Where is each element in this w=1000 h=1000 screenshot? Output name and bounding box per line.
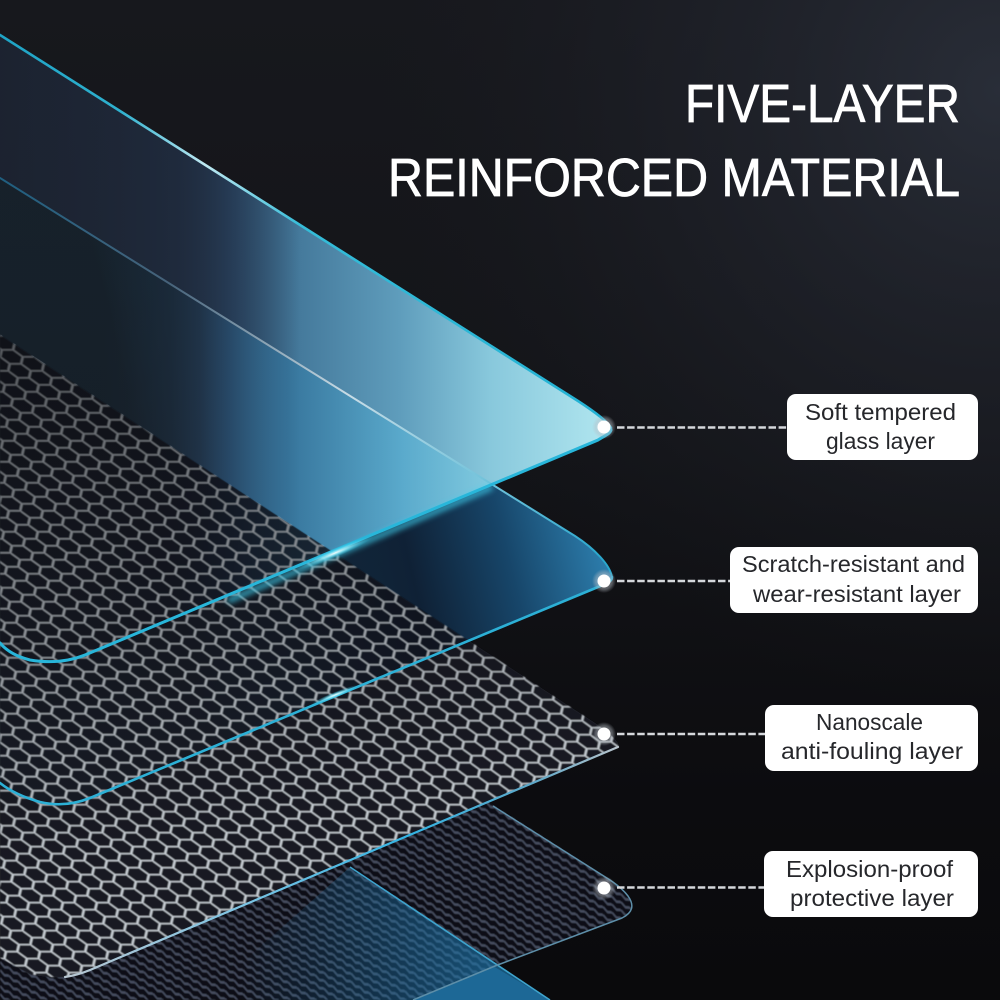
- layer 4: striped sheet: [0, 770, 632, 1000]
- label text: Nanoscale: [816, 709, 923, 735]
- layer 1 glow along lower edge: [230, 488, 490, 600]
- layer 3 lower edge: [65, 747, 618, 977]
- layer 5: solid blue corner: [413, 966, 550, 1000]
- marker dot: [592, 876, 616, 900]
- layer 1 navy band above the layer 2 edge: [0, 35, 300, 366]
- layer 1 top edge: [0, 35, 611, 428]
- dashed leader: [617, 426, 787, 429]
- layer 5: blue glass tint: [200, 867, 550, 1000]
- label text: Soft tempered: [805, 399, 956, 425]
- layer 1 gradient fill: [0, 35, 611, 662]
- dashed leader: [617, 580, 730, 582]
- label text: anti-fouling layer: [781, 738, 963, 764]
- marker dot: [592, 722, 616, 746]
- layer 4: outline: [413, 806, 632, 1000]
- dashed leader: [617, 733, 765, 735]
- callout: explosion-proof protective layer: [592, 851, 978, 917]
- panel: layer 3 hexagon mesh: [0, 335, 619, 977]
- panel: layer 5 and layer 4 striped base: [0, 770, 632, 1000]
- light glints on the edges: [295, 532, 375, 708]
- label text: Explosion-proof: [786, 856, 954, 882]
- label text: Scratch-resistant and: [742, 551, 965, 577]
- hexagon mesh sheet: [0, 335, 619, 977]
- glint on layer 1: [295, 532, 375, 574]
- label text: wear-resistant layer: [752, 581, 961, 607]
- layer 2 lower edge: [0, 577, 612, 804]
- layer 1 brighter band below the layer 2 edge: [220, 318, 453, 549]
- marker dot: [592, 415, 616, 439]
- panel: layer 2 glass: [0, 178, 612, 804]
- label box: [730, 547, 978, 613]
- dashed leader: [617, 886, 765, 889]
- mesh shading: [0, 335, 619, 977]
- layer 5: top edge: [350, 867, 550, 1000]
- callout: nanoscale anti-fouling layer: [592, 705, 978, 771]
- panel: layer 1 glass: [0, 36, 608, 586]
- marker dot: [592, 569, 616, 593]
- label box: [765, 705, 978, 771]
- glint on layer 2: [310, 682, 360, 708]
- label text: glass layer: [826, 428, 935, 454]
- label box: [764, 851, 978, 917]
- callout: soft tempered glass layer: [592, 394, 978, 460]
- layer 1 lower edge: [0, 430, 611, 662]
- callout: scratch-resistant and wear-resistant layer: [592, 547, 978, 613]
- label box: [787, 394, 978, 460]
- title line 1: FIVE-LAYER: [685, 74, 960, 134]
- label text: protective layer: [790, 885, 954, 911]
- title: [388, 74, 960, 208]
- layer 3 backing behind the mesh: [0, 335, 619, 977]
- edges of the sheets: [0, 35, 618, 977]
- layer 2 top edge: [0, 178, 612, 577]
